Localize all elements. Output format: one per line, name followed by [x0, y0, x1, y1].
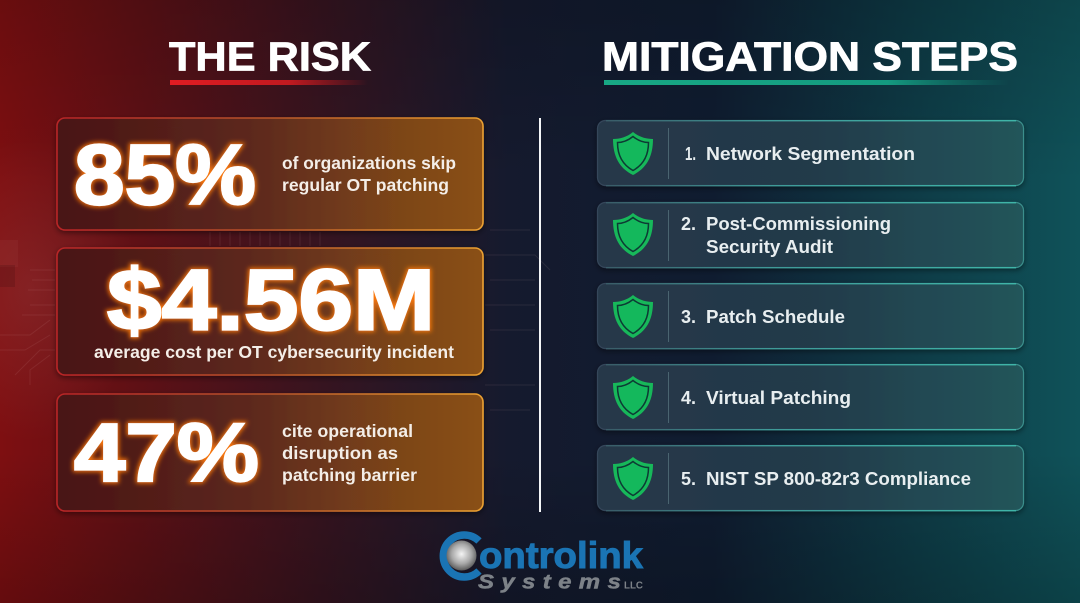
- step 4: virtual patching: Virtual Patching: [706, 387, 851, 408]
- stat card: $4.56M: [57, 248, 483, 375]
- stat card: 47%: 47%: [74, 406, 259, 499]
- logo: Controlink Systems LLC: Systems: [478, 570, 621, 593]
- step 4: virtual patching: 4.: [681, 387, 696, 408]
- heading: mitigation steps: MITIGATION STEPS: [602, 34, 1018, 80]
- panel: the risk statistics: [57, 118, 483, 511]
- icon: shield: [613, 376, 653, 419]
- stat card: 85%: 85%: [74, 128, 256, 223]
- stat card: 85%: [57, 118, 483, 230]
- step 3: patch schedule: 3.: [681, 306, 696, 327]
- step 5: NIST SP 800-82r3 compliance: NIST SP 800-82r3 Compliance: [706, 468, 971, 489]
- stat card: 85%: regular OT patching: [282, 175, 449, 195]
- step 5: NIST SP 800-82r3 compliance: 5.: [681, 468, 696, 489]
- logo: Controlink Systems LLC: [443, 535, 643, 593]
- stat card: $4.56M: $4.56M: [107, 252, 435, 348]
- step 4: virtual patching: [598, 364, 1024, 430]
- stat card: $4.56M: $4.56M: [107, 252, 435, 348]
- stat card: 85%: of organizations skip: [282, 153, 456, 173]
- icon: shield: [613, 295, 653, 338]
- step 1: network segmentation: 1.: [685, 143, 696, 164]
- step 3: patch schedule: [598, 283, 1024, 349]
- logo: Controlink Systems LLC: ontrolink: [479, 535, 643, 576]
- stat card: 47%: disruption as: [282, 443, 398, 463]
- step 1: network segmentation: Network Segmentation: [706, 143, 915, 164]
- step 1: network segmentation: [598, 120, 1024, 186]
- icon: logo sphere and ring: [443, 535, 479, 577]
- logo: Controlink Systems LLC: LLC: [624, 580, 643, 592]
- stat card: 47%: [57, 394, 483, 511]
- stat card: 47%: 47%: [74, 406, 259, 499]
- panel: mitigation steps: [598, 120, 1024, 511]
- stat card: 85%: 85%: [74, 128, 256, 223]
- step 2: post-commissioning security audit: Security Audit: [706, 236, 833, 257]
- step 2: post-commissioning security audit: [598, 202, 1024, 268]
- stat card: 47%: patching barrier: [282, 465, 417, 485]
- center divider: [539, 118, 541, 512]
- heading: the risk: THE RISK: [169, 34, 371, 80]
- step 5: NIST SP 800-82r3 compliance: [598, 445, 1024, 511]
- icon: shield: [613, 132, 653, 175]
- stat card: $4.56M: average cost per OT cybersecurity incident: [94, 342, 454, 362]
- step 2: post-commissioning security audit: Post-Commissioning: [706, 213, 891, 234]
- icon: shield: [613, 213, 653, 256]
- step 2: post-commissioning security audit: 2.: [681, 213, 696, 234]
- step 3: patch schedule: Patch Schedule: [706, 306, 845, 327]
- stat card: 47%: cite operational: [282, 421, 413, 441]
- icon: shield: [613, 457, 653, 500]
